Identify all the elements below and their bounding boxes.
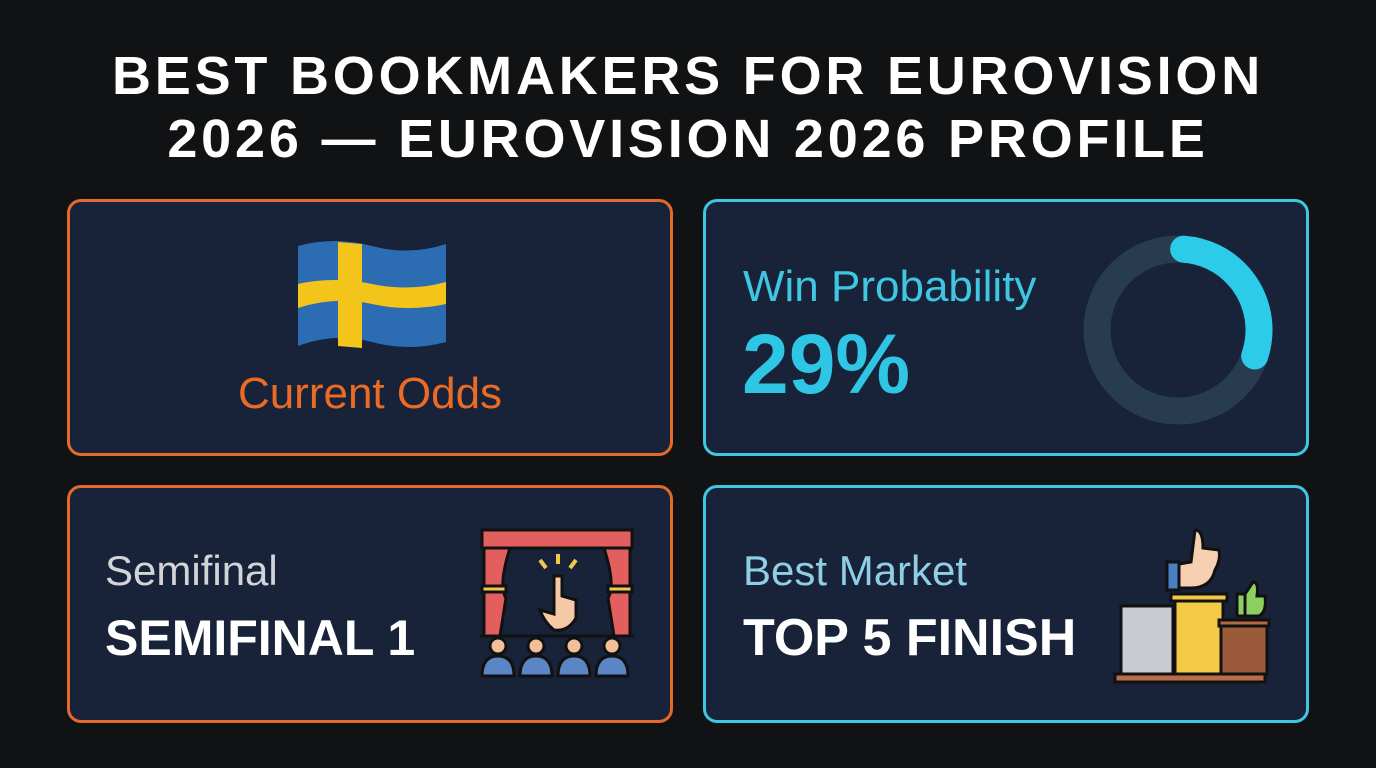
panel: semifinal	[67, 485, 673, 723]
value: top 5 finish: TOP 5 FINISH	[743, 609, 1076, 667]
panel: win probability	[703, 199, 1309, 456]
icon: podium with thumbs up	[1114, 528, 1270, 684]
icon: sweden flag	[298, 241, 446, 348]
title: 2026 — EUROVISION 2026 PROFILE	[167, 109, 1209, 169]
panel: current odds	[67, 199, 673, 456]
title: BEST BOOKMAKERS FOR EUROVISION	[112, 46, 1264, 106]
panel: best market	[703, 485, 1309, 723]
value: 29%: 29%	[742, 317, 910, 411]
label: semifinal: Semifinal	[105, 547, 278, 594]
donut chart	[1084, 236, 1272, 424]
label: best market: Best Market	[743, 547, 967, 594]
icon: theatre stage	[480, 528, 634, 678]
value: semifinal 1: SEMIFINAL 1	[105, 610, 415, 666]
title	[112, 46, 1264, 169]
label: current odds: Current Odds	[238, 369, 502, 418]
heading: win probability: Win Probability	[743, 262, 1036, 311]
